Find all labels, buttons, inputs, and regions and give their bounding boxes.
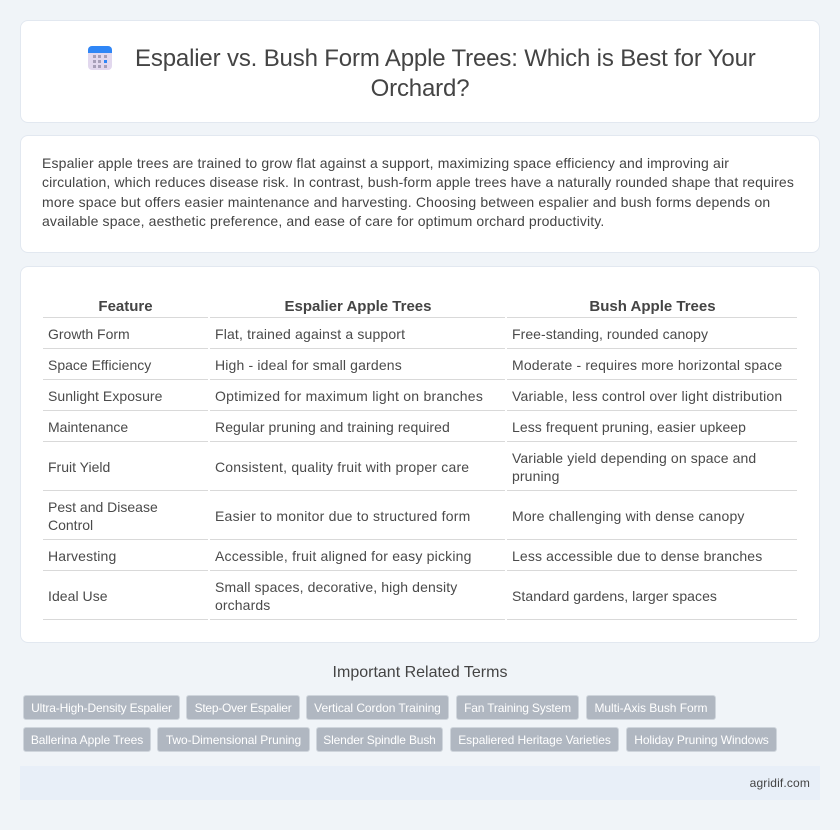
- row: pest and disease control: Pest and Disease: [48, 499, 158, 515]
- tag: Ballerina Apple Trees: [31, 733, 143, 747]
- related terms tags: [23, 695, 777, 752]
- row: maintenance: [48, 419, 746, 435]
- row: sunlight exposure: [48, 388, 782, 404]
- tag: [23, 727, 151, 752]
- row: space efficiency: High - ideal for small gardens: [215, 357, 402, 373]
- tag: [186, 695, 300, 720]
- tag: [456, 695, 579, 720]
- tag: Fan Training System: [464, 701, 571, 715]
- heading: important related terms: Important Related Terms: [333, 664, 507, 681]
- row: fruit yield: Consistent, quality fruit with proper care: [215, 459, 469, 475]
- row: harvesting: Less accessible due to dense branches: [512, 548, 762, 564]
- row: growth form: Free-standing, rounded canopy: [512, 326, 708, 342]
- tag: Vertical Cordon Training: [314, 701, 441, 715]
- row: space efficiency: [48, 357, 782, 373]
- intro text: circulation, which reduces disease risk. In contrast, bush-form apple trees have a naturally rounded shape that requires: [42, 174, 794, 190]
- tag: [23, 695, 180, 720]
- tag: Multi-Axis Bush Form: [594, 701, 708, 715]
- row: ideal use: orchards: [215, 597, 270, 613]
- tag: [306, 695, 449, 720]
- row: harvesting: Accessible, fruit aligned for easy picking: [215, 548, 472, 564]
- row: harvesting: [48, 548, 762, 564]
- row: pest and disease control: Easier to monitor due to structured form: [215, 508, 470, 524]
- tag: [316, 727, 443, 752]
- tag: Espaliered Heritage Varieties: [458, 733, 611, 747]
- title: Espalier vs. Bush Form Apple Trees: Which is Best for Your: [135, 45, 756, 72]
- footer source: agridif.com: [750, 776, 810, 790]
- row: harvesting: Harvesting: [48, 548, 116, 564]
- tag: [157, 727, 310, 752]
- panel: comparison table: [20, 266, 820, 643]
- row: fruit yield: [48, 450, 756, 484]
- table header row: Espalier Apple Trees: [284, 298, 432, 315]
- row: pest and disease control: Control: [48, 517, 93, 533]
- row: maintenance: Regular pruning and training required: [215, 419, 450, 435]
- panel: introduction: [20, 135, 820, 253]
- table header row: Bush Apple Trees: [589, 298, 716, 315]
- row: fruit yield: Fruit Yield: [48, 459, 110, 475]
- comparison table: [43, 298, 797, 620]
- intro text: [42, 155, 794, 229]
- row: growth form: Growth Form: [48, 326, 130, 342]
- row: maintenance: Less frequent pruning, easier upkeep: [512, 419, 746, 435]
- tag: Step-Over Espalier: [195, 701, 291, 715]
- row: ideal use: Ideal Use: [48, 588, 108, 604]
- panel: title card: [20, 20, 820, 123]
- tag: Two-Dimensional Pruning: [166, 733, 301, 747]
- row: ideal use: Standard gardens, larger spaces: [512, 588, 717, 604]
- row: growth form: Flat, trained against a support: [215, 326, 405, 342]
- tag: [626, 727, 777, 752]
- tag: [586, 695, 716, 720]
- tag: [450, 727, 619, 752]
- row: sunlight exposure: Sunlight Exposure: [48, 388, 162, 404]
- row: growth form: [48, 326, 708, 342]
- intro text: Espalier apple trees are trained to grow flat against a support, maximizing space efficiency and improving air: [42, 155, 729, 171]
- title: Orchard?: [371, 75, 469, 102]
- row: ideal use: Small spaces, decorative, high density: [215, 579, 457, 595]
- icon: calendar: [88, 46, 112, 70]
- row: maintenance: Maintenance: [48, 419, 128, 435]
- row: pest and disease control: [48, 499, 745, 533]
- table header row: Feature: [98, 298, 153, 315]
- tag: Holiday Pruning Windows: [634, 733, 769, 747]
- row: sunlight exposure: Optimized for maximum light on branches: [215, 388, 483, 404]
- title: [135, 45, 756, 102]
- intro text: more space but offers easier maintenance and harvesting. Choosing between espalier and bush forms depends on: [42, 194, 770, 210]
- tag: Ultra-High-Density Espalier: [31, 701, 172, 715]
- row: fruit yield: pruning: [512, 468, 559, 484]
- footer: [20, 766, 820, 800]
- row: pest and disease control: More challenging with dense canopy: [512, 508, 745, 524]
- row: sunlight exposure: Variable, less control over light distribution: [512, 388, 782, 404]
- row: fruit yield: Variable yield depending on space and: [512, 450, 756, 466]
- intro text: available space, aesthetic preference, and ease of care for optimum orchard productivity.: [42, 213, 604, 229]
- row: space efficiency: Space Efficiency: [48, 357, 151, 373]
- row: space efficiency: Moderate - requires more horizontal space: [512, 357, 782, 373]
- table header row: [98, 298, 716, 315]
- row: ideal use: [48, 579, 717, 613]
- tag: Slender Spindle Bush: [323, 733, 436, 747]
